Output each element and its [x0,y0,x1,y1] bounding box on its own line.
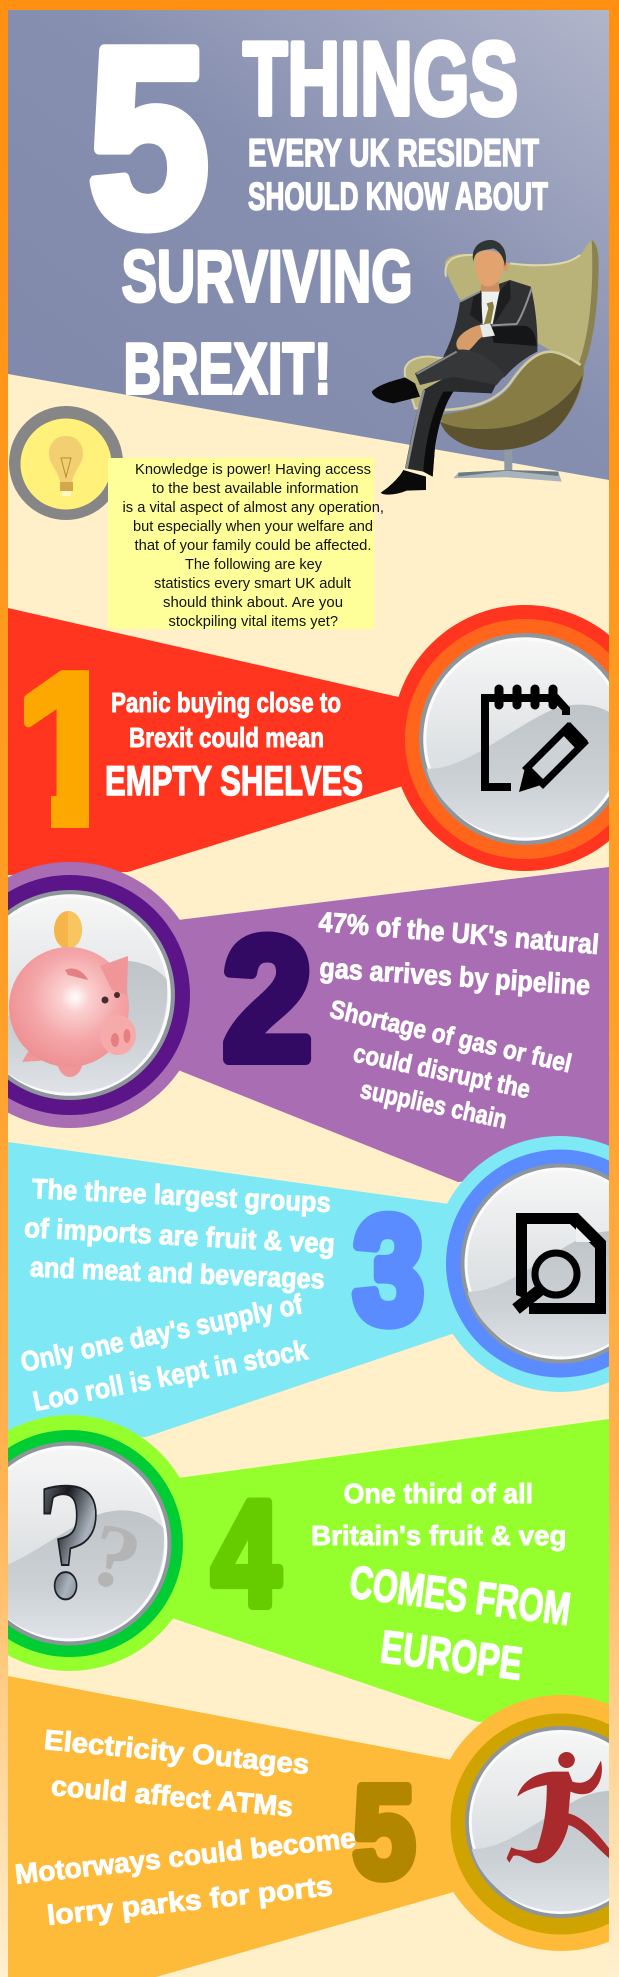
intro text block: statistics every smart UK adult [154,576,351,592]
number 1: 1 [15,628,125,869]
intro text block: Knowledge is power! Having access [135,462,371,478]
illustration: businessman in egg chair [372,240,599,495]
panel 3: imports [8,1136,619,1437]
icon: document with magnifier [516,1213,606,1314]
icon: lightbulb [9,406,123,520]
icon: question mark: ? [36,1448,104,1634]
icon: running figure [507,1752,609,1863]
title: brexit: BREXIT! [124,330,332,410]
intro text block [108,458,384,630]
text: gas arrives: gas arrives by pipeline [319,952,591,1001]
big number 5: 5 [88,0,209,279]
number 5: 5 [353,1758,415,1904]
header panel [8,0,609,480]
text: could disrupt: could disrupt the [351,1038,533,1104]
intro text block: stockpiling vital items yet? [168,614,338,630]
text: panic buying: Panic buying close to [111,687,341,718]
icon: question mark: ? [79,1504,151,1612]
panel 1: empty shelves [8,605,619,875]
text: supplies chain: supplies chain [358,1074,510,1134]
text: of imports: of imports are fruit & veg [23,1212,336,1259]
text: empty shelves: EMPTY SHELVES [105,757,363,804]
intro text block: but especially when your welfare and [133,519,373,535]
number 4: 4 [212,1470,280,1637]
text: europe: EUROPE [378,1620,525,1690]
intro text block: that of your family could be affected. [134,538,372,554]
intro text block: to the best available information [152,481,358,497]
text: brexit could mean: Brexit could mean [129,722,324,753]
number 2: 2 [223,901,312,1096]
icon: piggy bank [9,911,136,1077]
text: one day supply: Only one day's supply of [18,1288,306,1378]
text: one third: One third of all [344,1478,533,1509]
intro text block: should think about. Are you [163,595,343,611]
icon: notepad and pencil [485,689,588,792]
panel 5: outages [8,1676,619,1977]
intro text block: is a vital aspect of almost any operation, [122,500,384,516]
text: meat and beverages: and meat and beverages [29,1251,325,1295]
number 3: 3 [354,1185,424,1354]
text: loo roll: Loo roll is kept in stock [30,1334,311,1417]
panel 2: natural gas [0,862,609,1182]
text: electricity outages: Electricity Outages [43,1724,311,1780]
text: britains fruit: Britain's fruit & veg [311,1520,566,1551]
text: motorways: Motorways could become [13,1822,357,1890]
intro text block: The following are key [185,557,323,573]
panel 4: fruit and veg [0,1415,609,1722]
text: could affect atms: could affect ATMs [50,1770,294,1823]
text: lorry parks: lorry parks for ports [45,1870,334,1931]
text: shortage: Shortage of gas or fuel [327,994,575,1078]
text: three largest groups: The three largest groups [31,1173,331,1218]
title: surviving: SURVIVING [122,236,412,318]
